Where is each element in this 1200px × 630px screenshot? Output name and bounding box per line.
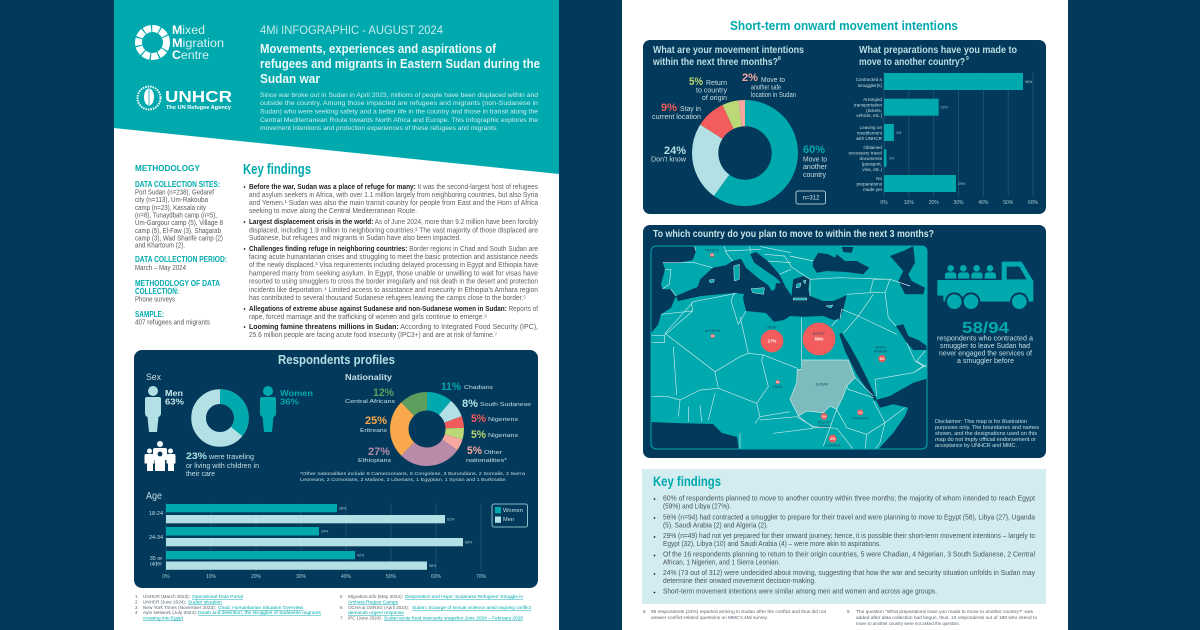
question: destination country: To which country do you plan to move to within the next 3 months? [653, 229, 934, 240]
logo: Mixed Migration Centre [138, 25, 224, 62]
movement intentions labels: Return [706, 80, 727, 87]
heading: respondents profiles: Respondents profiles [278, 353, 395, 367]
key findings list: hampered many from seeking asylum. In Egypt, those unable or unwilling to wait for visas have [249, 270, 538, 277]
question: preparations [859, 45, 1017, 68]
key findings list: 56% (n=94) had contracted a smuggler to prepare for their travel and were planning to move to Egypt (58), Libya (27), Uganda [663, 512, 1035, 521]
age bar chart: 70% [476, 574, 487, 580]
intro text: outside the country. Among those impacted are refugees and migrants (non-Sudanese in [260, 100, 538, 107]
preparations bar chart: 0% [880, 200, 888, 206]
references: Migration.info (May 2024): [348, 594, 403, 599]
nationality labels: 5% [471, 429, 486, 441]
key findings list: Allegations of extreme abuse against Sudanese and non-Sudanese women in Sudan: Reports of [249, 306, 538, 313]
intro text: Sudan) who were seeking safety and a better life in the country and those in transit along the [260, 108, 538, 116]
nationality labels: Eritreans [360, 428, 387, 434]
map disclaimer: Disclaimer: This map is for illustration [935, 419, 1027, 425]
intro text: movement intentions and protection experiences of these refugees and migrants. [260, 125, 498, 132]
preparations bar chart: Contracted a [856, 77, 882, 82]
footnotes: 9 [847, 609, 850, 614]
movement intentions labels: to country [696, 88, 727, 94]
question: movement intentions: 8 [778, 56, 781, 62]
movement intentions donut chart [705, 113, 785, 193]
nationality labels: 5% [467, 445, 482, 457]
methodology column: COLLECTION: [135, 287, 179, 296]
map: bubbles [710, 253, 886, 443]
references: Sudan acute food insecurity snapshot June 2024 – February 2025 [384, 616, 523, 620]
references: UNHCR (March 2023): [143, 594, 190, 599]
nationality labels: 8% [462, 398, 478, 410]
preparations bar chart: visa, etc.) [862, 167, 882, 172]
references: 7 [340, 616, 343, 620]
intro text [260, 92, 538, 132]
map disclaimer: purposes only. The boundaries and names [935, 425, 1039, 431]
map: bubble labels: 1% [711, 336, 715, 338]
preparations bar chart [849, 72, 1039, 206]
movement intentions labels: Stay in [680, 106, 701, 113]
key findings list: Largest displacement crisis in the world: As of June 2024, more than 9.2 million have been forcibly [249, 219, 538, 226]
key findings list: 25.6 million people are facing acute food insecurity (IPC3+) and are at risk of famine.⁷ [249, 332, 497, 339]
panel: respondents profiles [134, 350, 538, 588]
map: bubble labels: 4% [830, 437, 835, 441]
nationality labels: Nigeriens [488, 417, 518, 423]
stat: 58/94: respondents who contracted a [937, 336, 1033, 342]
footnotes: answer conflict-related questions on MMC's 4Mi survey. [651, 615, 768, 620]
preparations bar chart: (tickets, [866, 108, 882, 113]
methodology column: METHODOLOGY [135, 164, 201, 173]
children stat: their care [186, 471, 215, 478]
nationality labels: South Sudanese [480, 402, 531, 408]
key findings list: (5), Saudi Arabia (2) and Algeria (2). [663, 520, 768, 530]
map: bubble labels: ETHIOPIA [852, 416, 869, 420]
question: movement intentions: What are your movement intentions [653, 45, 804, 56]
key findings list: facing acute humanitarian crises and struggling to meet the basic protection and assistance needs [249, 254, 538, 261]
preparations bar chart: 56% [1025, 80, 1033, 84]
movement intentions labels: 5% [689, 76, 703, 88]
movement intentions labels: 24% [664, 145, 686, 157]
header band [114, 0, 559, 174]
methodology column: camp (n=23), Kassala city [135, 205, 206, 212]
movement intentions labels [651, 72, 828, 179]
references: Ayin Network (July 2024): [143, 610, 197, 615]
title: Sudan war [260, 72, 320, 86]
map: bubble labels: 27% [768, 339, 776, 344]
references: 2 [135, 600, 138, 604]
age bar chart: 42% [357, 554, 365, 558]
footnotes: The question "What preparations have you made to move to another country?" was [856, 609, 1034, 614]
key findings list: Short-term movement intentions were similar among men and women and across age groups. [663, 587, 937, 596]
preparations bar chart: 1% [889, 156, 895, 160]
age bar chart: 0% [162, 574, 170, 580]
key findings list: resorted to using smugglers to cross the border irregularly and risk death in the desert and protection [249, 279, 538, 286]
intro text: Since war broke out in Sudan in April 2023, millions of people have been displaced within and [260, 92, 538, 99]
preparations bar chart: 10% [904, 200, 914, 206]
preparations bar chart: Obtained [863, 145, 882, 150]
panel: left page [114, 0, 559, 630]
sample size badge: n=312 [803, 196, 820, 202]
header eyebrow: 4Mi INFOGRAPHIC - AUGUST 2024 [260, 23, 443, 37]
age bar chart: 10% [206, 574, 217, 580]
preparations bar chart: necessary travel [849, 150, 882, 156]
age bar chart: 58% [429, 564, 437, 568]
map [651, 246, 930, 451]
key findings list: displaced, including 1.9 million to neighboring countries.² The vast majority of those displaced are [249, 227, 538, 234]
key findings list: determine their onward movement decision-making. [663, 576, 816, 585]
age bar chart: 66% [465, 540, 473, 544]
heading: nationality: Nationality [345, 372, 392, 382]
map: bubble labels: 1% [776, 382, 780, 384]
references: 1 [135, 594, 138, 599]
references: Sudan: Scourge of sexual violence amid ongoing conflict [412, 605, 532, 610]
nationality labels: 11% [441, 381, 461, 393]
nationality footnote: Leoneans, 2 Comorians, 2 Malians, 2 Liberians, 1 Egyptian, 1 Syrian and 1 Burkinabe. [300, 477, 507, 483]
preparations bar chart: Arranged [863, 97, 882, 102]
preparations bar chart: 20% [929, 200, 939, 206]
key findings list: Looming famine threatens millions in Sudan: According to Integrated Food Security (IPC), [249, 324, 538, 331]
references: demands urgent response [348, 610, 404, 615]
key findings list: and asylum seekers in Africa, with over 1.1 million largely from neighboring countries, but also Syria [249, 192, 538, 199]
movement intentions labels: location in Sudan [751, 92, 796, 99]
icon: truck with people [937, 262, 1033, 310]
question: preparations: 9 [966, 56, 969, 62]
references: Sudan situation [188, 600, 222, 604]
map: bubble labels: SAUDI [875, 346, 886, 350]
references: Death and detention, the struggles of Sudanese migrants [198, 610, 322, 615]
references: UNHCR (June 2024): [143, 600, 186, 604]
nationality footnote [300, 471, 525, 483]
question: movement intentions: within the next three months? [652, 57, 778, 68]
key findings list: rape, forced marriage and the trafficking of women and girls continue to emerge.⁶ [249, 314, 487, 321]
heading: key findings: Key findings [243, 162, 311, 178]
age bar chart: 60% [431, 574, 442, 580]
movement intentions labels: Move to [761, 77, 785, 84]
heading: key findings: Key findings [653, 473, 721, 489]
map: bubble labels: EGYPT [813, 332, 825, 336]
methodology column: METHODOLOGY OF DATA [135, 279, 220, 288]
key findings list: 24% (73 out of 312) were undecided about moving, suggesting that how the war and security situation unfolds in Sudan may [663, 568, 1035, 577]
heading: age: Age [146, 490, 162, 502]
map: bubble labels: 1% [710, 255, 715, 257]
age bar chart: 34% [321, 530, 329, 534]
children stat: were traveling [208, 454, 254, 461]
heading: sex: Sex [146, 372, 161, 382]
age bar chart: 50% [386, 574, 397, 580]
icon: family [144, 441, 176, 471]
movement intentions labels: current location [652, 114, 701, 121]
methodology column: SAMPLE: [135, 310, 164, 319]
logo: Mixed Migration Centre: Mixed [172, 25, 205, 37]
key findings list: 29% (n=49) had not yet prepared for their onward journey; hence, it is possible their short-term movement intentions – largely to [663, 531, 1035, 540]
map: bubble labels: ALGERIA [705, 329, 721, 333]
key findings list: (59%) and Libya (27%). [663, 502, 731, 511]
preparations bar chart: 22% [940, 106, 948, 110]
key findings list [654, 494, 1035, 596]
panel: destination map [643, 225, 1046, 458]
map disclaimer [935, 419, 1039, 449]
question: preparations: move to another country? [859, 57, 965, 68]
preparations bar chart: Leaving on [860, 125, 882, 130]
key findings list: African, 1 Nigerien, and 1 Sierra Leonian. [663, 558, 780, 567]
references: OCHA & OSRSG (April 2024): [348, 605, 409, 610]
references: New York Times (November 2023): [143, 605, 216, 610]
women label: Women [280, 388, 313, 398]
preparations bar chart: 29% [958, 182, 966, 186]
preparations bar chart: with UNHCR [856, 136, 883, 141]
men label: Men [165, 388, 183, 398]
sex donut chart [199, 397, 241, 439]
preparations bar chart: 50% [1003, 200, 1014, 206]
map: bubble labels: LIBYA [766, 326, 777, 330]
key findings list: Sudanese, but refugees and migrants in Sudan have also been impacted. [249, 235, 461, 242]
references: Chad: Humanitarian Situation Overview [218, 605, 304, 610]
map: bubble labels: 59% [815, 337, 823, 342]
key findings list: Of the 16 respondents planning to return to their origin countries, 5 were Chadian, 4 Nigerian, 3 South Sudanese, 2 Central [663, 550, 1035, 559]
question: preparations: What preparations have you made to [859, 45, 1017, 56]
movement intentions labels: another safe [751, 84, 781, 92]
methodology column: and Khartoum (2). [135, 242, 185, 250]
nationality footnote: *Other nationalities include 8 Cameroonians, 6 Congolese, 3 Burundians, 2 Somalis, 2 Sierra [300, 471, 525, 477]
map disclaimer: map do not imply official endorsement or [935, 437, 1036, 443]
nationality labels: Ethiopians [358, 458, 391, 464]
preparations bar chart: documents [860, 156, 883, 161]
map: bubble labels [705, 249, 888, 448]
preparations bar chart: 40% [978, 200, 989, 206]
men label: 63% [165, 396, 184, 406]
sample size badge [796, 191, 826, 204]
map: borders Africa [651, 293, 853, 449]
references [135, 594, 532, 620]
references: 6 [340, 605, 343, 610]
children stat [186, 451, 259, 478]
panel: right page [622, 0, 1068, 630]
map: bubble labels: SOUTH [817, 420, 830, 424]
movement intentions labels: 9% [661, 102, 677, 114]
stat: 58/94 [937, 320, 1033, 365]
age bar chart: older [150, 562, 162, 568]
age bar chart: 38% [339, 506, 347, 510]
key findings list: seeking to move along the Central Mediterranean Route. [249, 208, 417, 215]
movement intentions labels: Move to [803, 156, 827, 164]
references: 4 [135, 610, 138, 615]
methodology column: camp (5), El-Faw (3), Shagarab [135, 228, 221, 235]
age bar chart: 35 or [150, 556, 162, 562]
methodology column: 407 refugees and migrants [135, 320, 210, 326]
children stat: 23% [186, 451, 207, 461]
references: Operational Data Portal [192, 594, 243, 599]
references: IPC (June 2024): [348, 616, 382, 620]
map: bubble labels: UGANDA [825, 444, 841, 448]
nationality labels: Other [484, 450, 502, 456]
preparations bar chart: 30% [953, 200, 964, 206]
movement intentions labels: Don't know [651, 156, 687, 164]
movement intentions labels: 2% [742, 72, 758, 84]
stat: 58/94: 58/94 [962, 320, 1009, 337]
age bar chart: 40% [341, 574, 352, 580]
map: bubble labels: 2% [822, 415, 826, 419]
footnotes: added after data collection had begun, thus, 19 respondents out of 188 who intend to [856, 615, 1037, 620]
stat: 58/94: a smuggler before [957, 358, 1014, 365]
age legend: Women [503, 508, 523, 514]
nationality labels: 12% [373, 387, 394, 399]
nationality labels: 27% [368, 446, 390, 458]
title [260, 42, 540, 86]
footnotes [643, 609, 1037, 626]
women label: 36% [280, 396, 299, 406]
key findings list: Challenges finding refuge in neighboring countries: Border regions in Chad and South Sudan are [249, 246, 538, 253]
map: bubble labels: CHAD [772, 385, 783, 389]
preparations bar chart: made yet [863, 187, 883, 192]
map: bubble labels: ARABIA [874, 350, 888, 354]
methodology column: March – May 2024 [135, 265, 186, 272]
map: bubble labels: SUDAN [817, 424, 830, 428]
nationality labels: Chadians [464, 385, 493, 391]
nationality labels: nationalities* [466, 458, 508, 464]
nationality labels: Nigerians [488, 433, 518, 439]
men label [165, 388, 184, 406]
icon: woman [260, 386, 276, 432]
map: borders west [651, 246, 791, 343]
logo: UNHCR: UNHCR [165, 89, 233, 106]
preparations bar chart: (passport, [862, 162, 882, 166]
movement intentions labels: 60% [803, 144, 825, 156]
map: seas [651, 246, 930, 451]
preparations bar chart: smuggler(s) [858, 83, 882, 88]
map: bubble labels: SUDAN [816, 383, 829, 387]
title: Movements, experiences and aspirations of [260, 42, 497, 56]
children stat: or living with children in [186, 463, 259, 470]
footnotes: move to another country were not asked the question. [856, 621, 960, 626]
logo: UNHCR [138, 86, 233, 111]
map: bubble labels: FRANCE [705, 249, 720, 253]
movement intentions labels: another [803, 164, 828, 171]
methodology column: Phone surveys [135, 296, 175, 304]
age legend [492, 504, 528, 527]
references: Amhara Region Camps [348, 600, 399, 604]
references: Desperation and Hope: Sudanese Refugees' Struggle in [405, 594, 523, 599]
question: movement intentions [652, 45, 804, 68]
methodology column: Um-Gargour camp (5), Village 8 [135, 220, 223, 227]
preparations bar chart: transportation [854, 102, 882, 108]
preparations bar chart: resettlement [857, 130, 883, 136]
icon: man [145, 386, 161, 432]
preparations bar chart: vehicle, etc.) [856, 113, 882, 118]
methodology column [135, 164, 227, 326]
key findings list: 60% of respondents planned to move to another country within three months; the majority of whom intended to reach Egypt [663, 494, 1035, 503]
movement intentions labels: country [803, 172, 826, 179]
references: 3 [135, 605, 138, 610]
key findings list [244, 184, 538, 339]
preparations bar chart: 4% [896, 131, 902, 135]
age legend: Men [503, 517, 514, 523]
stat: 58/94: smuggler to leave Sudan had [940, 343, 1030, 350]
map: bubble labels: 3% [880, 357, 884, 361]
map: Sudan [790, 360, 855, 416]
panel: key findings [642, 469, 1046, 604]
map: bubble labels: 2% [858, 411, 863, 415]
age bar chart [149, 503, 487, 580]
methodology column: DATA COLLECTION SITES: [135, 180, 220, 189]
key findings list: Egypt (32), Libya (10) and Saudi Arabia (4) – were more akin to aspirations. [663, 539, 881, 548]
age bar chart: 18-24 [149, 511, 163, 517]
references: 5 [340, 594, 343, 599]
nationality labels [345, 381, 531, 464]
key findings list: of the newly displaced.³ Visa requirements including delayed processing in Egypt and Ethiopia have [249, 262, 538, 269]
age bar chart: 62% [447, 518, 455, 522]
methodology column: camp (3), Wad Sharife camp (2) [135, 236, 223, 242]
map: islands [709, 264, 833, 308]
nationality labels: Central Africans [345, 399, 395, 405]
nationality labels: 5% [471, 413, 486, 425]
key findings list: and Yemen.¹ Sudan was also the main transit country for people from East and the Horn of Africa [249, 200, 538, 207]
title: short-term onward movement intentions: Short-term onward movement intentions [730, 18, 958, 33]
methodology column: DATA COLLECTION PERIOD: [135, 255, 227, 264]
nationality labels: 25% [365, 415, 387, 427]
logo: Mixed Migration Centre: Migration [172, 38, 224, 50]
methodology column: Port Sudan (n=238), Gedaref [135, 190, 214, 196]
logo: Mixed Migration Centre: Centre [172, 50, 209, 62]
women label [280, 388, 313, 406]
map disclaimer: shown, and the designations used on this [935, 431, 1037, 437]
nationality donut chart [399, 401, 455, 457]
intro text: Central Mediterranean Route towards North Africa and Europe. This infographic explores the [260, 117, 538, 124]
map disclaimer: acceptance by UNHCR and MMC. [935, 443, 1017, 449]
preparations bar chart: preparations [856, 182, 883, 186]
methodology column: city (n=113), Um-Rakouba [135, 197, 208, 204]
references: crossing into Egypt [143, 616, 184, 620]
logo: UNHCR: The UN Refugee Agency [166, 105, 232, 111]
preparations bar chart: 60% [1028, 200, 1039, 206]
footnotes: 95 respondents (23%) reported arriving in Sudan after the conflict and thus did not [651, 609, 827, 614]
age bar chart: 20% [251, 574, 262, 580]
methodology column: (n=8), Tunaydbah camp (n=5), [135, 212, 217, 220]
panel: movement intentions and preparations [643, 40, 1046, 214]
key findings list: Before the war, Sudan was a place of refuge for many: It was the second-largest host of refugees [249, 184, 538, 191]
movement intentions labels: of origin [702, 95, 727, 102]
title: refugees and migrants in Eastern Sudan during the [260, 57, 540, 71]
age bar chart: 30% [296, 574, 307, 580]
footnotes: 8 [643, 609, 646, 614]
preparations bar chart: No [876, 176, 882, 181]
key findings list: has contributed to several thousand Sudanese refugees leaving the camps close to the border.⁵ [249, 295, 526, 302]
map: borders east [790, 256, 930, 451]
age bar chart: 24-34 [149, 535, 163, 541]
stat: 58/94: never engaged the services of [939, 350, 1032, 358]
key findings list: incidents like deportation.⁴ Limited access to assistance and insecurity in Ethiopia's Amhara region [249, 287, 538, 294]
